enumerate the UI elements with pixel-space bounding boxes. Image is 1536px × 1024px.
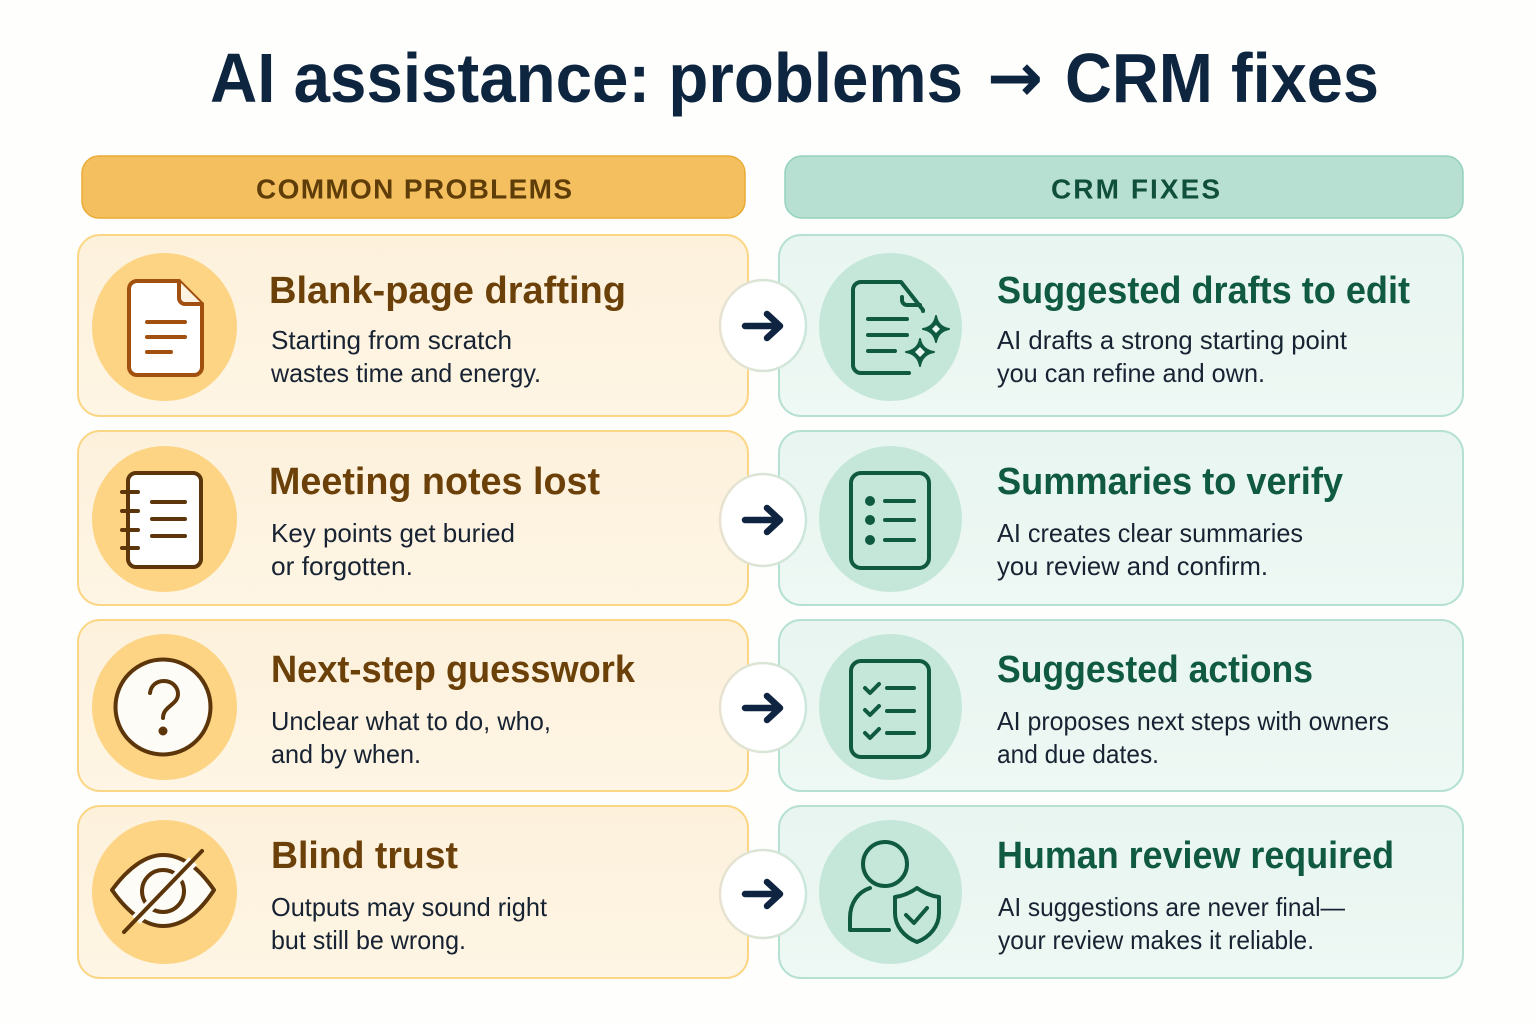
arrow: row 1	[720, 280, 806, 371]
description: and due dates.	[997, 739, 1159, 769]
description: AI proposes next steps with owners	[997, 706, 1389, 736]
heading: Next-step guesswork	[271, 649, 636, 691]
description	[997, 325, 1348, 388]
arrow: row 3	[720, 663, 806, 752]
fix card: human review required	[779, 806, 1463, 978]
heading: Blind trust	[271, 835, 458, 877]
description: you can refine and own.	[997, 358, 1265, 388]
heading: Suggested drafts to edit	[997, 270, 1410, 312]
description: or forgotten.	[271, 551, 413, 581]
description: AI drafts a strong starting point	[997, 325, 1348, 355]
description: and by when.	[271, 739, 421, 769]
title	[210, 39, 1379, 118]
title: AI assistance: problems	[210, 39, 963, 117]
description: AI creates clear summaries	[997, 518, 1303, 548]
header: common problems	[82, 156, 745, 218]
heading: Summaries to verify	[997, 461, 1343, 503]
description	[997, 706, 1389, 769]
description: Outputs may sound right	[271, 892, 548, 922]
header: CRM fixes	[785, 156, 1463, 218]
description	[998, 892, 1345, 955]
description: Unclear what to do, who,	[271, 706, 551, 736]
description: Starting from scratch	[271, 325, 512, 355]
description: your review makes it reliable.	[998, 925, 1314, 955]
description	[271, 892, 548, 955]
fix card: suggested drafts	[779, 235, 1463, 416]
description: Key points get buried	[271, 518, 515, 548]
problem card: blank-page drafting	[78, 235, 748, 416]
title: CRM fixes	[1065, 39, 1379, 117]
icon: question mark	[116, 660, 210, 754]
icon: notebook	[122, 473, 201, 567]
icon: blank document	[129, 281, 202, 375]
title: →	[987, 39, 1043, 118]
description	[271, 706, 551, 769]
heading: Human review required	[997, 835, 1394, 877]
description	[997, 518, 1303, 581]
icon: crossed-out eye	[112, 851, 214, 932]
problem card: blind trust	[78, 806, 748, 978]
description: but still be wrong.	[271, 925, 466, 955]
fix card: summaries to verify	[779, 431, 1463, 605]
arrow: row 4	[720, 850, 806, 938]
description: AI suggestions are never final—	[998, 892, 1345, 922]
heading: Suggested actions	[997, 649, 1313, 691]
header: common problems: COMMON PROBLEMS	[256, 174, 572, 204]
description	[271, 518, 515, 581]
header: CRM fixes: CRM FIXES	[1051, 174, 1220, 204]
description: wastes time and energy.	[270, 358, 541, 388]
description	[270, 325, 541, 388]
icon: person with shield	[850, 842, 939, 942]
icon: bulleted list	[851, 473, 929, 568]
heading: Blank-page drafting	[269, 270, 626, 312]
problem card: next-step guesswork	[78, 620, 748, 791]
icon: checklist	[851, 661, 929, 757]
problem card: meeting notes lost	[78, 431, 748, 605]
arrow: row 2	[720, 474, 806, 566]
description: you review and confirm.	[997, 551, 1268, 581]
icon: document with sparkles	[853, 282, 949, 373]
fix card: suggested actions	[779, 620, 1463, 791]
heading: Meeting notes lost	[269, 461, 600, 503]
